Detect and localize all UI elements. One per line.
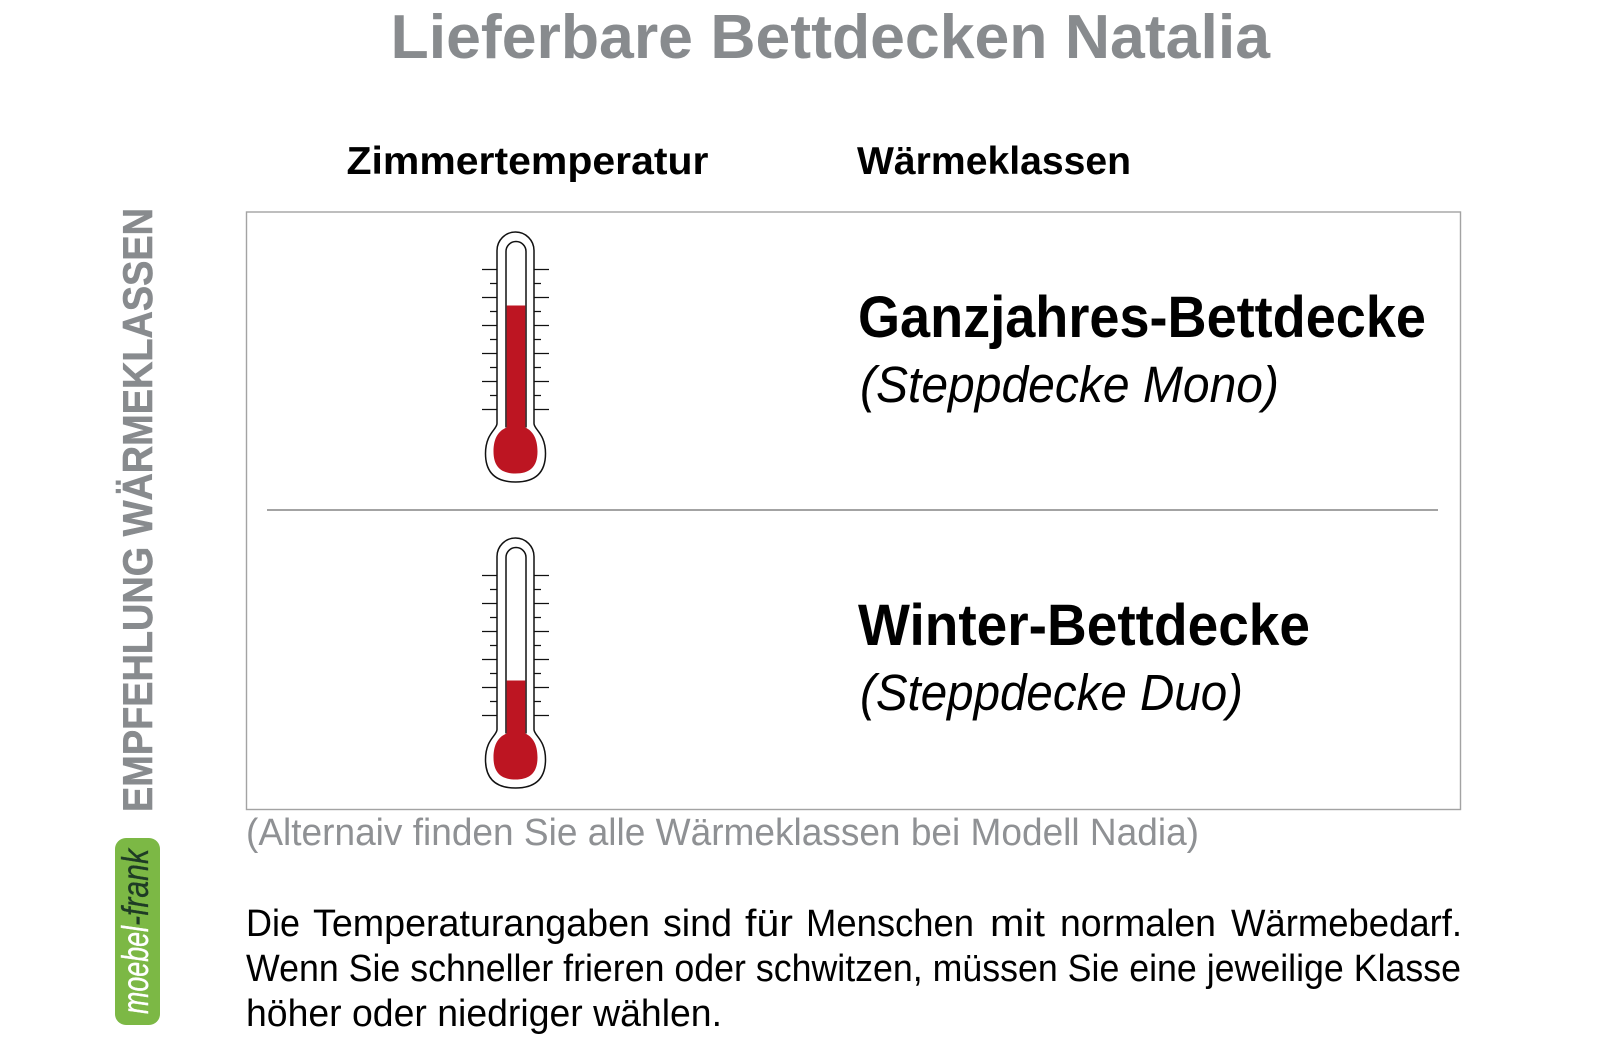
text block: explanation: normalen bbox=[1060, 903, 1216, 945]
column heading: room temperature: Zimmertemperatur bbox=[346, 140, 708, 183]
icon: thermometer high bbox=[482, 232, 549, 482]
text block: explanation: sind bbox=[663, 903, 732, 945]
text block: explanation: Die bbox=[246, 903, 300, 945]
text block: explanation: Temperaturangaben bbox=[313, 903, 650, 945]
text block: explanation bbox=[246, 903, 1462, 1035]
text block: explanation: für bbox=[745, 903, 793, 945]
text block: explanation: Wärmebedarf. bbox=[1231, 903, 1462, 945]
text block: explanation: Menschen bbox=[806, 903, 974, 945]
panel: recommendations bbox=[246, 212, 1460, 810]
text block: explanation: mit bbox=[990, 903, 1045, 945]
column heading: warmth classes: Wärmeklassen bbox=[857, 140, 1131, 183]
logo: moebel-frank: -frank bbox=[115, 847, 156, 926]
vertical label: EMPFEHLUNG WÄRMEKLASSEN bbox=[114, 208, 161, 812]
text block: explanation: Wenn Sie schneller frieren oder schwitzen, müssen Sie eine jeweilige Klasse bbox=[246, 948, 1461, 990]
title: Lieferbare Bettdecken Natalia bbox=[390, 3, 1271, 72]
text block: explanation: höher oder niedriger wählen. bbox=[246, 993, 722, 1035]
sublabel: mono quilt: (Steppdecke Mono) bbox=[860, 356, 1279, 413]
label: all-year duvet: Ganzjahres-Bettdecke bbox=[858, 285, 1426, 350]
note: alternative model: (Alternaiv finden Sie alle Wärmeklassen bei Modell Nadia) bbox=[246, 812, 1199, 854]
logo: moebel-frank bbox=[115, 838, 160, 1025]
logo: moebel-frank: moebel bbox=[115, 925, 156, 1014]
label: winter duvet: Winter-Bettdecke bbox=[858, 593, 1310, 658]
icon: thermometer low bbox=[482, 538, 549, 788]
sublabel: duo quilt: (Steppdecke Duo) bbox=[860, 664, 1243, 721]
